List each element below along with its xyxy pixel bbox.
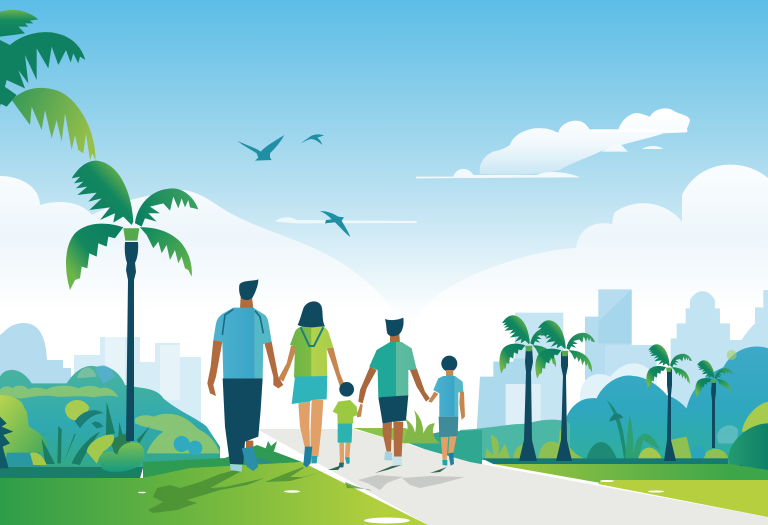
center grass clump [587,400,627,458]
back ground strip [482,458,728,464]
foliage: left park [0,365,220,478]
boy [428,356,465,466]
blue-green treetops [77,367,97,378]
child shadow on grass [345,482,372,491]
mother [278,301,344,467]
walking path [257,429,768,525]
mother shadow on grass [265,467,330,482]
low ground strip left [0,467,143,478]
cloud bank: left [0,176,410,345]
palm 3 [646,344,692,461]
cloud streaks [416,129,687,178]
cloud streak near lower bird [275,217,417,223]
cloud: upper right [480,108,690,175]
foliage: right park [460,347,768,481]
lawn: right [493,464,768,490]
right corner bush [742,402,768,432]
bird: large [237,135,284,161]
family [207,279,465,472]
palms: right group [499,315,733,461]
skyline: right [477,289,768,430]
palm 2 [535,320,595,461]
rounded shrub and leaves [65,400,89,420]
path markers [138,480,664,524]
teal tree mass [567,347,768,460]
birds [237,134,350,237]
ground [0,428,768,525]
crown [66,161,198,290]
bush cluster at palm base [110,433,133,460]
lawn: front [0,462,428,525]
bird: small [301,134,324,145]
teal ground behind path [400,430,482,466]
lawn: back wedge [143,445,302,478]
trunk [125,242,138,441]
bird: lower [320,211,350,237]
left green understory [460,420,570,460]
father [207,279,283,472]
older child [358,318,430,465]
father shadow on grass [148,470,265,513]
palm 1 [499,315,559,461]
left yellow-green bush [0,395,47,457]
palm: middle [66,161,198,441]
skyline: left [0,323,201,440]
sunlit leaf band [0,386,118,399]
small child [333,382,363,467]
grass clump behind family [403,410,440,443]
cloud bank: right [400,165,768,345]
back hedge [0,366,220,467]
foot shadows [328,465,447,473]
small grass tuft near path [265,441,277,451]
palm: top left [0,10,96,160]
palm 4 [695,360,733,448]
shadows on path [358,475,465,490]
cast shadows [148,465,465,513]
